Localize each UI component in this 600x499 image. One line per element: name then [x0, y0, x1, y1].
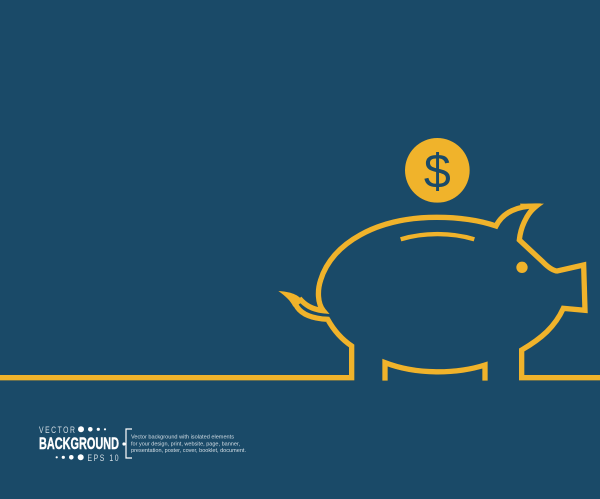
- pointed tail tip: [278, 291, 303, 307]
- description text: [131, 435, 246, 454]
- bracket: [126, 429, 132, 458]
- dollar sign: $: [424, 144, 451, 198]
- description text: presentation, poster, cover, booklet, document.: [131, 448, 246, 454]
- VECTOR label with dots: VECTOR: [39, 425, 76, 435]
- piggy bank illustration: [0, 138, 600, 381]
- coin: [405, 138, 470, 203]
- description text: for your design, print, website, page, banner,: [131, 442, 240, 448]
- piggy eye: [516, 262, 528, 273]
- piggy belly line: [385, 363, 485, 381]
- BACKGROUND label: BACKGROUND: [39, 435, 119, 453]
- VECTOR label with dots: [39, 425, 106, 435]
- EPS 10 label with dots: EPS 10: [88, 453, 120, 463]
- coin slot: [401, 234, 474, 239]
- EPS 10 label with dots: [56, 453, 120, 463]
- pointed ear tip: [520, 204, 544, 218]
- footer logo block: [39, 425, 246, 463]
- piggy body outline and baseline: [0, 206, 600, 378]
- description text: Vector background with isolated elements: [131, 435, 234, 441]
- bracket pointer: [122, 442, 126, 446]
